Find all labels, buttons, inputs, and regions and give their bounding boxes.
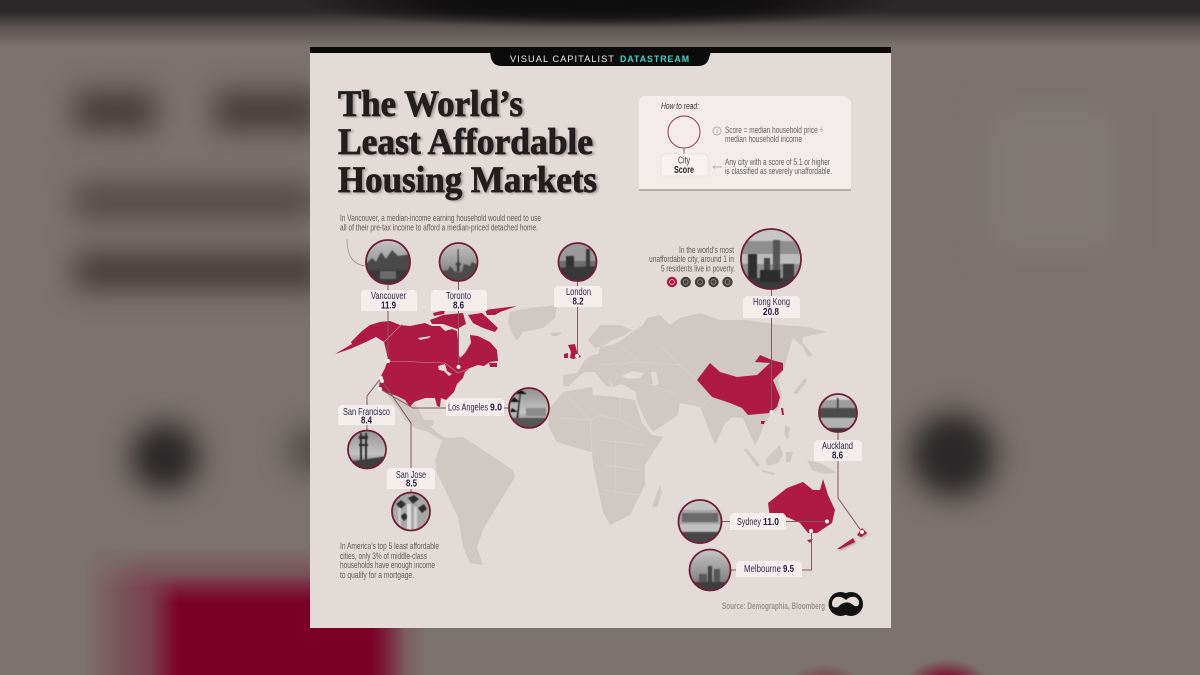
city: Toronto [431, 241, 487, 312]
land: Japan, Philippines, Indonesia, New Guinea [743, 378, 837, 475]
label: Melbourne: Melbourne [744, 563, 781, 575]
label: Los Angeles: Los Angeles [448, 402, 488, 414]
label: Sydney [730, 513, 786, 530]
label: Hong Kong: Hong Kong [753, 296, 790, 308]
highlight: New Zealand [837, 528, 867, 549]
label: Auckland: 8.6 [832, 450, 843, 462]
photo: San Francisco [347, 430, 387, 470]
legend label: City [678, 154, 690, 166]
text: Vancouver note [340, 213, 541, 232]
panel: infographic sheet [310, 47, 891, 628]
label: Hong Kong: 20.8 [763, 306, 779, 318]
photo: Toronto [438, 242, 478, 282]
city: San Jose [387, 468, 435, 533]
text: America note: households have enough income [340, 560, 435, 570]
label: Sydney: Sydney [737, 516, 762, 528]
label: San Jose: 8.5 [406, 478, 417, 490]
panel: how to read: Score = median household price ÷ [725, 125, 823, 135]
label: Sydney: 11.0 [763, 516, 779, 528]
world map [335, 305, 867, 565]
highlight: Australia [768, 479, 835, 543]
water: Great Lakes and Bear Lake [418, 336, 452, 376]
icon: info [713, 127, 721, 136]
label: Toronto: Toronto [446, 290, 471, 302]
text: Hong Kong poverty note [649, 245, 735, 274]
photo: Auckland [818, 393, 858, 433]
icon: info: i [716, 130, 718, 136]
land: Eurasia [563, 313, 827, 445]
label: San Francisco: 8.4 [361, 414, 372, 426]
Africa borders [560, 392, 645, 495]
photo: London [558, 242, 598, 282]
city: Los Angeles [446, 386, 551, 430]
land: Africa [548, 387, 663, 525]
label: Toronto: 8.6 [453, 300, 464, 312]
connector lines [367, 281, 862, 570]
text: America note: to qualify for a mortgage. [340, 570, 414, 580]
label: Melbourne: 9.5 [783, 563, 794, 575]
text: Vancouver note: In Vancouver, a median-income earning household would need to use [340, 213, 541, 223]
land: South America [435, 437, 515, 565]
title [338, 83, 597, 200]
land: Mexico and Central America [385, 392, 449, 444]
title: Housing Markets [338, 159, 597, 200]
panel: how to read: How to read: [661, 101, 699, 112]
label: Vancouver: Vancouver [371, 290, 406, 302]
header bar: VISUAL CAPITALIST [510, 54, 615, 64]
highlight: United Kingdom [564, 344, 581, 359]
label: Auckland [814, 440, 862, 462]
city: Melbourne [688, 548, 802, 592]
label: Los Angeles: 9.0 [490, 402, 502, 414]
text: America note: cities, only 3% of middle-class [340, 551, 427, 561]
label: Melbourne [736, 561, 802, 577]
label: Vancouver [361, 290, 417, 312]
header bar: DATASTREAM [620, 54, 690, 64]
highlight: China [697, 355, 784, 424]
text: Hong Kong poverty note: In the world’s most [679, 245, 734, 255]
city: Hong Kong [739, 227, 803, 318]
text: Hong Kong poverty note: unaffordable city, around 1 in [649, 254, 734, 264]
source: Source: Demographia, Bloomberg [722, 601, 825, 611]
borders: Canada and USA [384, 324, 470, 373]
label: San Francisco [338, 405, 395, 426]
arrow [713, 166, 722, 168]
label: Toronto [431, 290, 487, 312]
text: Hong Kong poverty note: 5 residents live in poverty. [661, 264, 735, 274]
icons: 1 in 5 residents [667, 277, 733, 287]
city: Vancouver [361, 238, 417, 312]
photo: Los Angeles [507, 386, 551, 430]
photo: Melbourne [688, 548, 732, 592]
panel: how to read [639, 96, 851, 191]
text: Vancouver note: all of their pre-tax income to afford a median-priced detached home. [340, 222, 538, 232]
panel: how to read: median household income [725, 134, 802, 144]
text: America note [340, 541, 439, 580]
land: Greenland and Iceland [508, 305, 562, 341]
icon: Visual Capitalist logo [828, 592, 863, 616]
label: London [554, 286, 602, 308]
panel: how to read: is classified as severely unaffordable. [725, 166, 832, 176]
label: London: 8.2 [572, 296, 584, 308]
label: San Jose [387, 468, 435, 490]
highlight: Canada and USA [335, 306, 517, 407]
label: San Francisco: San Francisco [343, 406, 390, 418]
text: America note: In America’s top 5 least affordable [340, 541, 439, 551]
header bar [310, 47, 891, 66]
city marker dots [378, 354, 864, 534]
legend label [661, 154, 708, 176]
label: Los Angeles [446, 398, 504, 416]
label: Vancouver: 11.9 [381, 300, 396, 312]
photo: Vancouver [364, 238, 412, 286]
photo: Sydney [678, 499, 722, 544]
Eurasia borders [600, 345, 712, 407]
city: Sydney [676, 498, 786, 546]
arrow: Vancouver note pointer [347, 239, 365, 266]
label: London: London [566, 286, 591, 298]
photo: Hong Kong [739, 227, 803, 291]
city: San Francisco [338, 405, 395, 471]
city: London [554, 241, 602, 308]
land: Madagascar [652, 485, 662, 507]
water: Black Sea and Caspian [622, 371, 659, 386]
legend label: Score [674, 164, 694, 176]
city: Auckland [814, 392, 862, 462]
title: The World’s [338, 83, 523, 124]
title: Least Affordable [338, 121, 593, 162]
label: Auckland: Auckland [822, 440, 853, 452]
panel: how to read: Any city with a score of 5.1 or higher [725, 157, 830, 167]
photo: San Jose [391, 492, 431, 532]
label: Hong Kong [743, 296, 800, 318]
legend circle [668, 116, 700, 148]
land: Scandinavia [588, 325, 632, 348]
label: San Jose: San Jose [396, 469, 426, 481]
